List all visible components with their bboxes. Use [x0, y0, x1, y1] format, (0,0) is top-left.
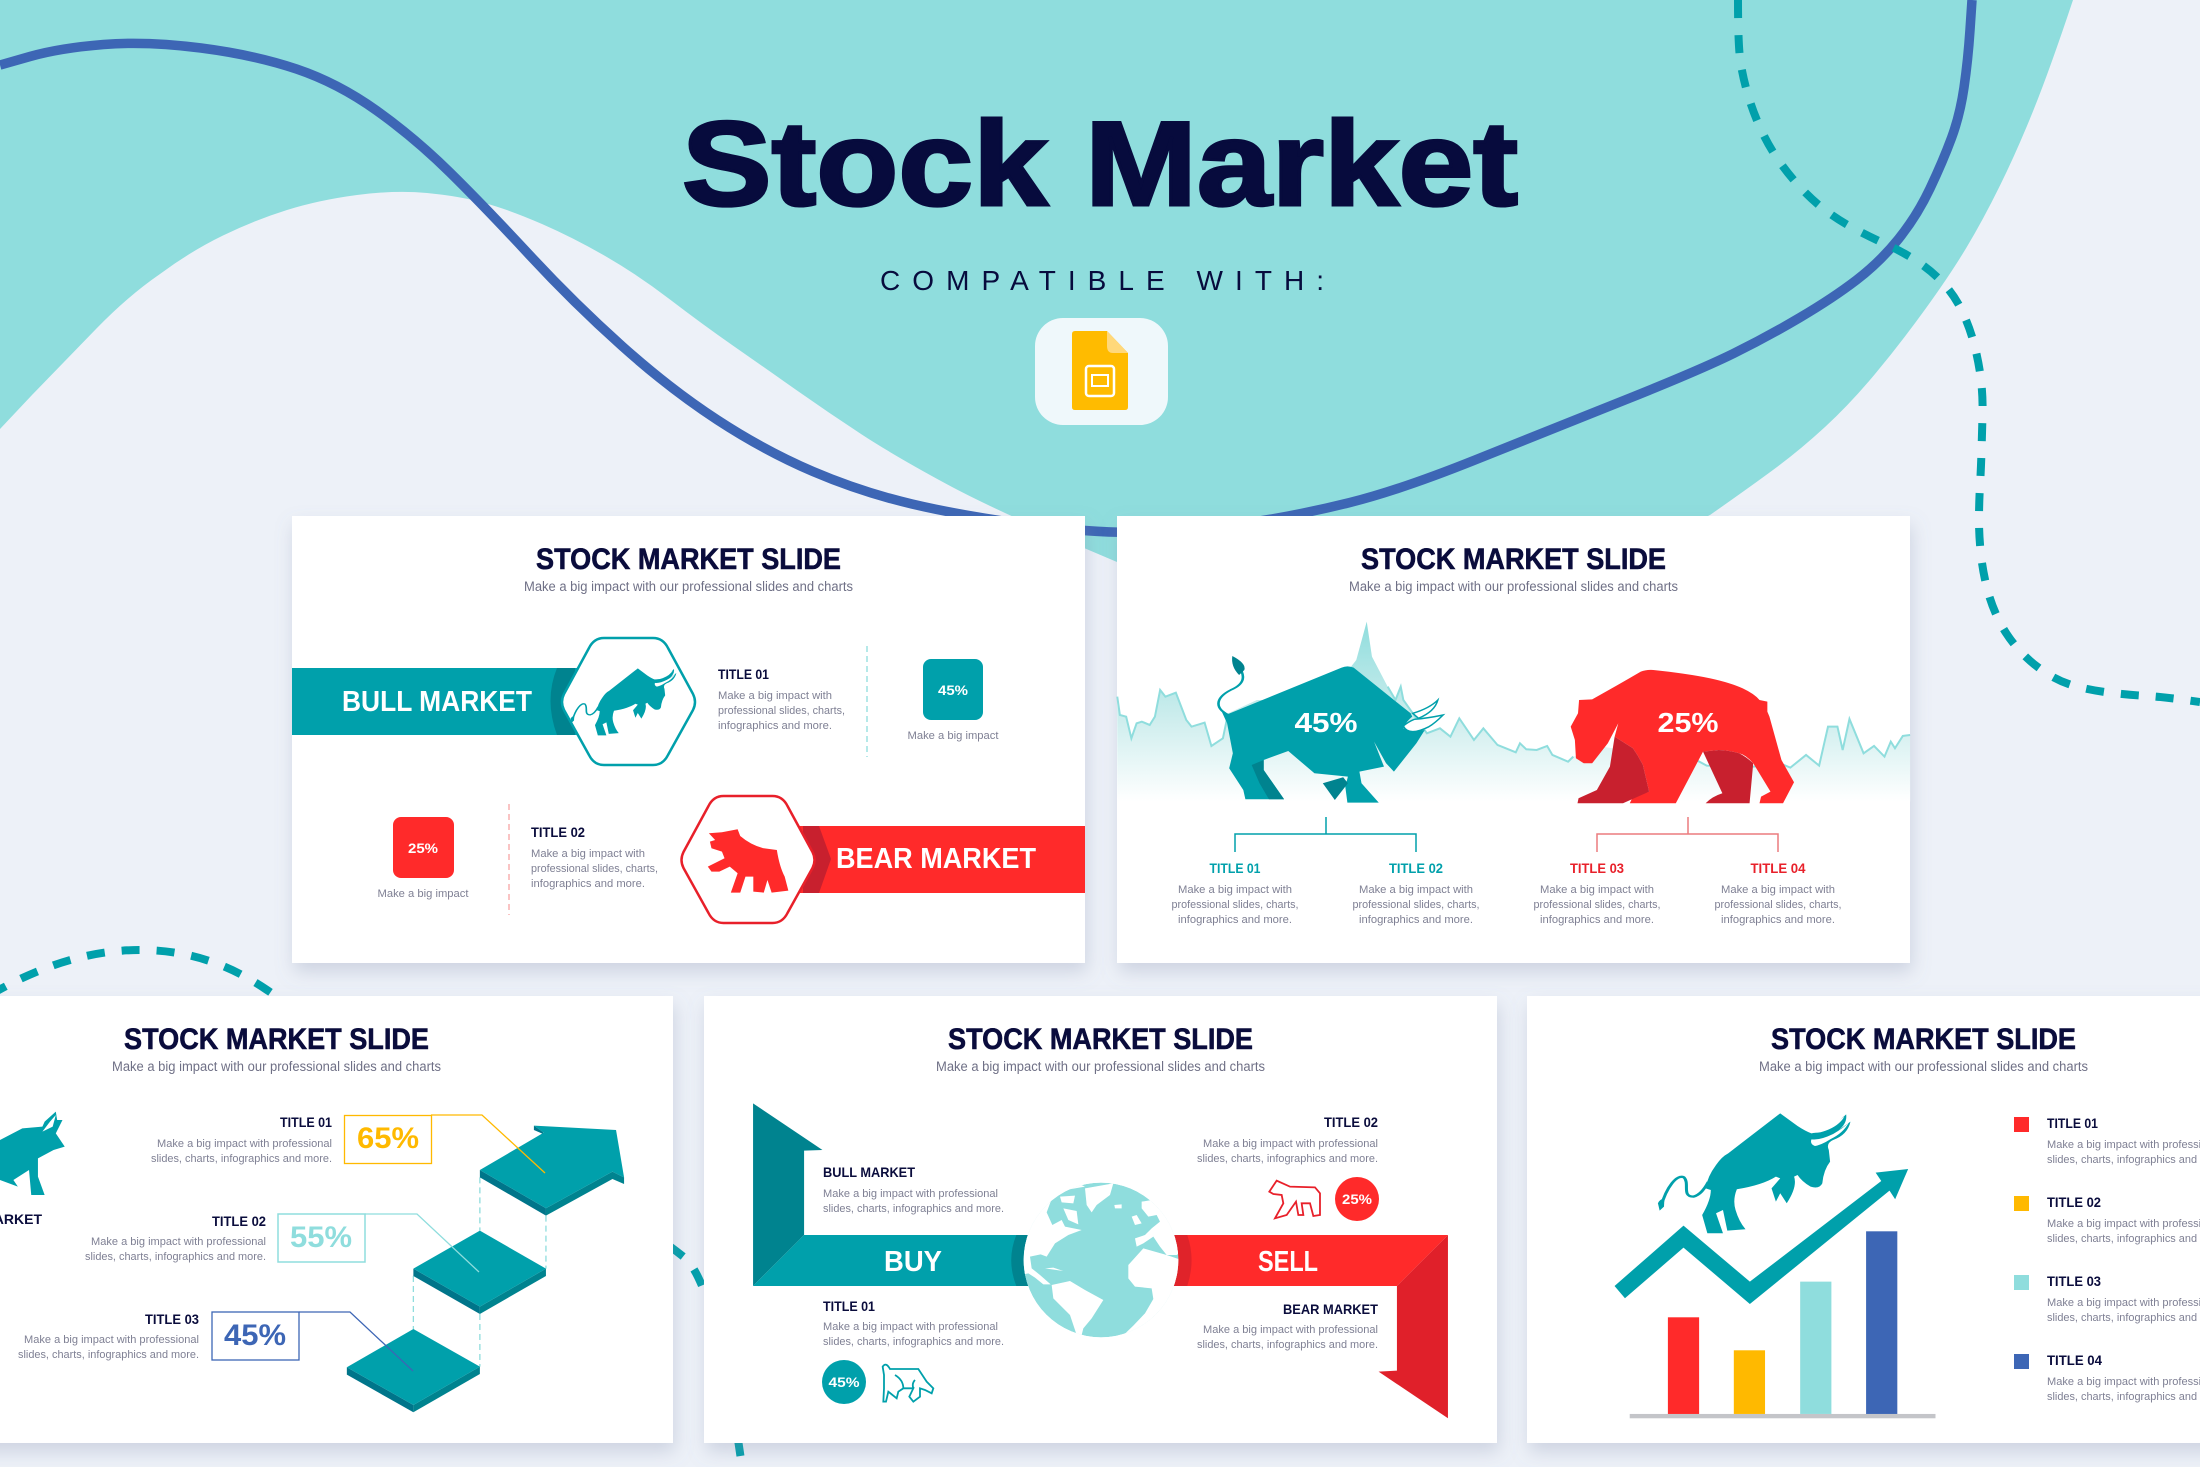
panel: slide 3 isometric steps: [0, 996, 673, 1443]
stat: 25% circle: 25%: [1342, 1191, 1373, 1207]
text: title 01: Make a big impact with: [1178, 884, 1292, 896]
legend: title 04: [2014, 1352, 2200, 1403]
stat: 25%: Make a big impact: [378, 888, 469, 900]
text: title 02: professional slides, charts,: [531, 863, 658, 875]
buy arrow: [753, 1103, 1047, 1286]
stat: 25%: 25%: [408, 840, 439, 856]
text: title 02: Make a big impact with professional: [1203, 1138, 1378, 1150]
stat: 45%: [908, 659, 999, 742]
isometric arrow steps: [347, 1126, 624, 1412]
panel: slide 4 buy and sell: Make a big impact with our professional slides and charts: [936, 1059, 1265, 1074]
stat: bull 45%: 45%: [1294, 707, 1358, 738]
callout 65%: [151, 1114, 545, 1173]
panel: slide 5 bar chart with bull: STOCK MARKET SLIDE: [1771, 1023, 2076, 1056]
callout 65%: 65%: [357, 1122, 419, 1155]
text: title 02: infographics and more.: [531, 878, 645, 890]
legend: title 01: TITLE 01: [2047, 1115, 2098, 1131]
text: title 04: TITLE 04: [1750, 860, 1806, 876]
text: title 04: Make a big impact with: [1721, 884, 1835, 896]
panel: slide 3 isometric steps: STOCK MARKET SLIDE: [124, 1023, 429, 1056]
bear hexagon: [682, 796, 814, 923]
panel: slide 4 buy and sell: [704, 996, 1497, 1443]
icon: bear outline: [1269, 1181, 1320, 1218]
text: title 01: TITLE 01: [823, 1298, 875, 1314]
legend: title 04: TITLE 04: [2047, 1352, 2102, 1368]
text: title 02: infographics and more.: [1359, 914, 1473, 926]
text: title 01: [1172, 860, 1298, 926]
legend: title 03: [2014, 1273, 2200, 1324]
text: title 01: professional slides, charts,: [1172, 899, 1298, 911]
stat: 45% circle: [822, 1360, 866, 1404]
text: bear market: [1197, 1301, 1378, 1351]
callout 65%: TITLE 01: [280, 1114, 332, 1130]
stat: 45%: Make a big impact: [908, 730, 999, 742]
callout 45%: TITLE 03: [145, 1311, 199, 1327]
bull market band: [292, 668, 577, 735]
text: title 01: Make a big impact with: [718, 690, 832, 702]
text: title 04: professional slides, charts,: [1714, 899, 1842, 911]
teal background blob: [0, 0, 2073, 562]
stat: 45% circle: 45%: [828, 1374, 860, 1390]
panel: slide 2 bull vs bear chart: STOCK MARKET SLIDE: [1361, 543, 1666, 576]
text: title 03: TITLE 03: [1570, 860, 1624, 876]
main title: Stock Market: [682, 97, 1518, 231]
bull market band: BULL MARKET: [342, 686, 532, 718]
text: title 01: Make a big impact with professional: [823, 1321, 998, 1333]
sell label: SELL: [1258, 1246, 1318, 1278]
text: bear market: Make a big impact with professional: [1203, 1324, 1378, 1336]
bear market band: [797, 826, 1085, 893]
text: bull market: slides, charts, infographics and more.: [823, 1203, 1004, 1215]
stat: 25% circle: [1335, 1177, 1379, 1221]
legend: title 03: TITLE 03: [2047, 1273, 2101, 1289]
market line chart: [1117, 622, 1910, 802]
text: title 02: [531, 824, 658, 890]
text: title 02: TITLE 02: [1389, 860, 1443, 876]
text: title 04: infographics and more.: [1721, 914, 1835, 926]
panel: slide 1 bull and bear market: STOCK MARKET SLIDE: [536, 543, 841, 576]
legend: title 02: [2014, 1194, 2200, 1245]
stat: 25%: [378, 817, 469, 900]
text: title 02: TITLE 02: [531, 824, 585, 840]
callout 65%: slides, charts, infographics and more.: [151, 1153, 332, 1165]
text: title 03: infographics and more.: [1540, 914, 1654, 926]
text: bull market: Make a big impact with professional: [823, 1188, 998, 1200]
text: title 01: professional slides, charts,: [718, 705, 845, 717]
text: title 01: TITLE 01: [1210, 860, 1261, 876]
text: title 01: slides, charts, infographics and more.: [823, 1336, 1004, 1348]
subtitle: compatible with: COMPATIBLE WITH:: [880, 265, 1324, 296]
callout 55%: slides, charts, infographics and more.: [85, 1251, 266, 1263]
buy label: BUY: [884, 1246, 942, 1278]
cropped bull: [0, 1112, 65, 1195]
callout 55%: TITLE 02: [212, 1213, 266, 1229]
sell arrow: [1149, 1235, 1448, 1418]
bull hexagon: [562, 638, 695, 765]
text: bull market: BULL MARKET: [823, 1164, 915, 1180]
legend: title 02: TITLE 02: [2047, 1194, 2101, 1210]
callout 45%: Make a big impact with professional: [24, 1334, 199, 1346]
large bull: [1218, 656, 1443, 803]
text: title 02: Make a big impact with: [531, 848, 645, 860]
text: title 04: [1714, 860, 1842, 926]
callout 55%: Make a big impact with professional: [91, 1236, 266, 1248]
panel: slide 3 isometric steps: Make a big impact with our professional slides and charts: [112, 1059, 441, 1074]
text: title 02: professional slides, charts,: [1352, 899, 1480, 911]
blue curve: [0, 0, 1972, 532]
dashed teal curve bottom left: [0, 950, 742, 1467]
text: title 02: [1197, 1114, 1378, 1165]
text: title 01: infographics and more.: [718, 720, 832, 732]
text: title 01: [718, 666, 845, 732]
icon: bull outline: [883, 1365, 933, 1402]
text: title 03: professional slides, charts,: [1534, 899, 1660, 911]
bear market band: BEAR MARKET: [836, 843, 1036, 875]
callout 45%: [18, 1311, 413, 1371]
callout 45%: slides, charts, infographics and more.: [18, 1349, 199, 1361]
text: title 02: Make a big impact with: [1359, 884, 1473, 896]
text: title 02: [1352, 860, 1480, 926]
stat: 45%: 45%: [938, 682, 969, 698]
text: title 01: [823, 1298, 1004, 1348]
panel: slide 1 bull and bear market: Make a big impact with our professional slides and charts: [524, 579, 853, 594]
panel: slide 5 bar chart with bull: [1527, 996, 2200, 1443]
large bear: [1571, 670, 1794, 803]
teal connector: [1235, 817, 1416, 852]
dashed teal curve top right: [1738, 0, 2200, 702]
text: title 02: slides, charts, infographics and more.: [1197, 1153, 1378, 1165]
callout 55%: [85, 1213, 479, 1272]
text: title 01: infographics and more.: [1178, 914, 1292, 926]
text: title 01: TITLE 01: [718, 666, 769, 682]
icon: google slides: [1035, 318, 1168, 425]
callout 45%: 45%: [224, 1319, 286, 1352]
stat: bear 25%: 25%: [1658, 707, 1719, 738]
panel: slide 4 buy and sell: STOCK MARKET SLIDE: [948, 1023, 1253, 1056]
text: bull market: [823, 1164, 1004, 1215]
text: title 03: [1534, 860, 1660, 926]
legend: title 01: [2014, 1115, 2200, 1166]
bull and growth chart: [1615, 1113, 1935, 1418]
callout 65%: Make a big impact with professional: [157, 1138, 332, 1150]
text: bear market: BEAR MARKET: [1283, 1301, 1378, 1317]
panel: slide 5 bar chart with bull: Make a big impact with our professional slides and charts: [1759, 1059, 2088, 1074]
text: title 02: TITLE 02: [1324, 1114, 1378, 1130]
panel: slide 2 bull vs bear chart: [1117, 516, 1910, 963]
callout 55%: 55%: [290, 1221, 352, 1254]
panel: slide 1 bull and bear market: [292, 516, 1085, 963]
text: title 03: Make a big impact with: [1540, 884, 1654, 896]
panel: slide 2 bull vs bear chart: Make a big impact with our professional slides and charts: [1349, 579, 1678, 594]
red connector: [1597, 817, 1778, 852]
text: bear market: slides, charts, infographics and more.: [1197, 1339, 1378, 1351]
globe: [1024, 1182, 1178, 1338]
